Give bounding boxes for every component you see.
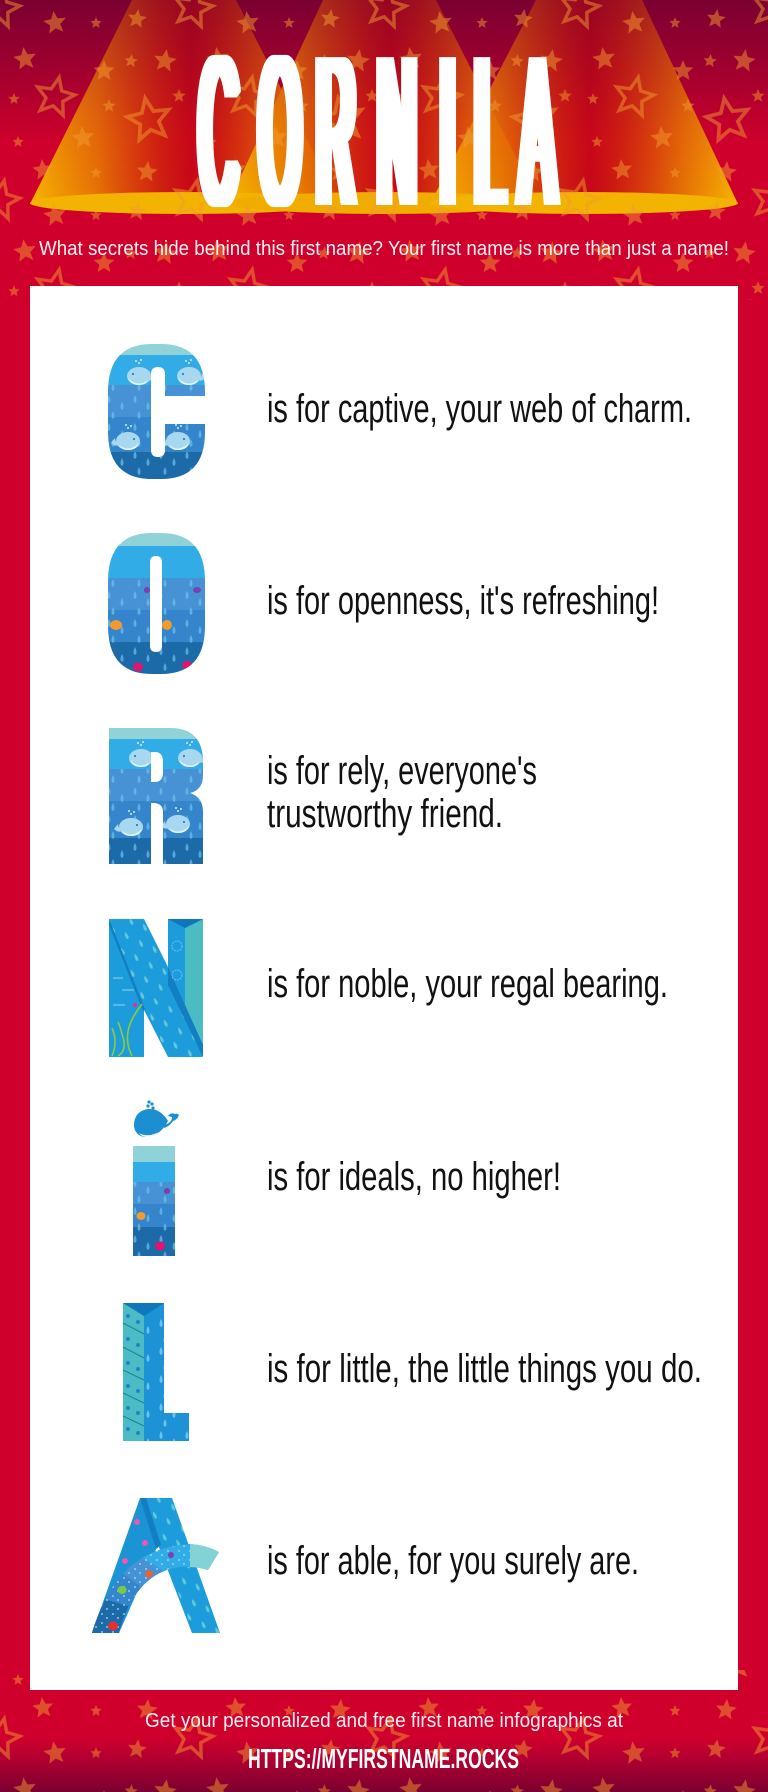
text: A line: is for able, for you surely are. <box>267 1539 639 1583</box>
star pattern: header <box>0 0 768 300</box>
spotlight cones <box>30 0 738 214</box>
title: CORNILA <box>199 11 555 252</box>
text: R lines: trustworthy friend. <box>267 792 503 836</box>
footer url: HTTPS://MYFIRSTNAME.ROCKS <box>248 1743 519 1774</box>
icon: letter L <box>123 1303 189 1441</box>
footer text: Get your personalized and free first name infographics at <box>145 1710 623 1732</box>
icon: letter A <box>92 1498 220 1633</box>
icon: letter I <box>133 1146 175 1256</box>
icon: letter R <box>109 728 203 864</box>
white panel <box>30 286 738 1690</box>
icon: letter N <box>109 919 203 1057</box>
icon: letter O <box>108 533 205 674</box>
text: R lines: is for rely, everyone's <box>267 749 537 793</box>
text: I line: is for ideals, no higher! <box>267 1155 561 1199</box>
subtitle: What secrets hide behind this first name? Your first name is more than just a name! <box>39 238 729 260</box>
star pattern: footer <box>0 1670 768 1792</box>
icon: whale above I <box>134 1100 179 1137</box>
icon: letter C <box>108 344 205 479</box>
text: R lines <box>267 749 537 836</box>
